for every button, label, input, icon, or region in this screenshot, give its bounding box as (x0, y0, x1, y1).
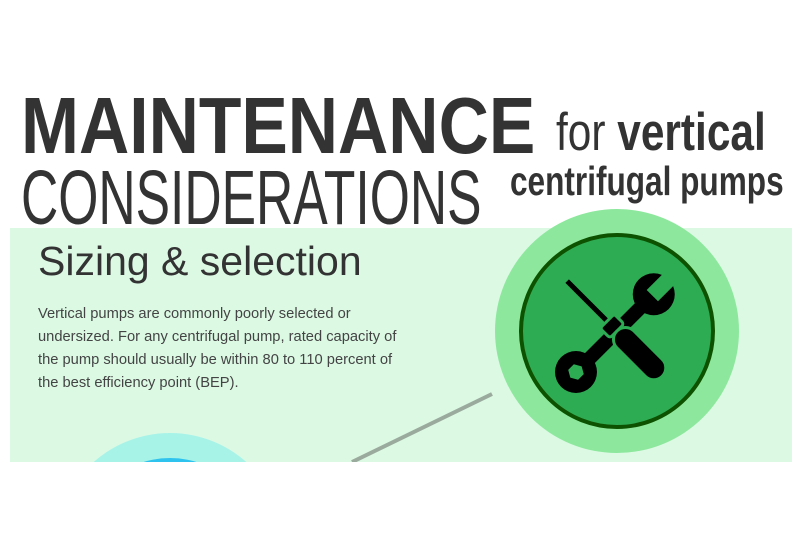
wrench (546, 261, 687, 402)
title: CONSIDERATIONS: CONSIDERATIONS (21, 155, 482, 241)
icon: tools in green circle (495, 209, 739, 453)
heading: Sizing & selection (38, 238, 362, 284)
body text: the best efficiency point (BEP). (38, 375, 239, 391)
panel: sizing & selection (10, 228, 792, 462)
title: MAINTENANCE: MAINTENANCE (21, 81, 535, 170)
subtitle: centrifugal pumps: centrifugal pumps (510, 158, 784, 204)
subtitle: for vertical: for vertical (556, 103, 766, 162)
body text: Vertical pumps are commonly poorly selected or (38, 306, 351, 322)
body text (38, 306, 396, 391)
body text: undersized. For any centrifugal pump, rated capacity of (38, 329, 396, 345)
decorative graphics: connector line, cyan circle (94, 392, 493, 462)
body text: the pump should usually be within 80 to 110 percent of (38, 352, 392, 368)
screwdriver (558, 272, 671, 385)
